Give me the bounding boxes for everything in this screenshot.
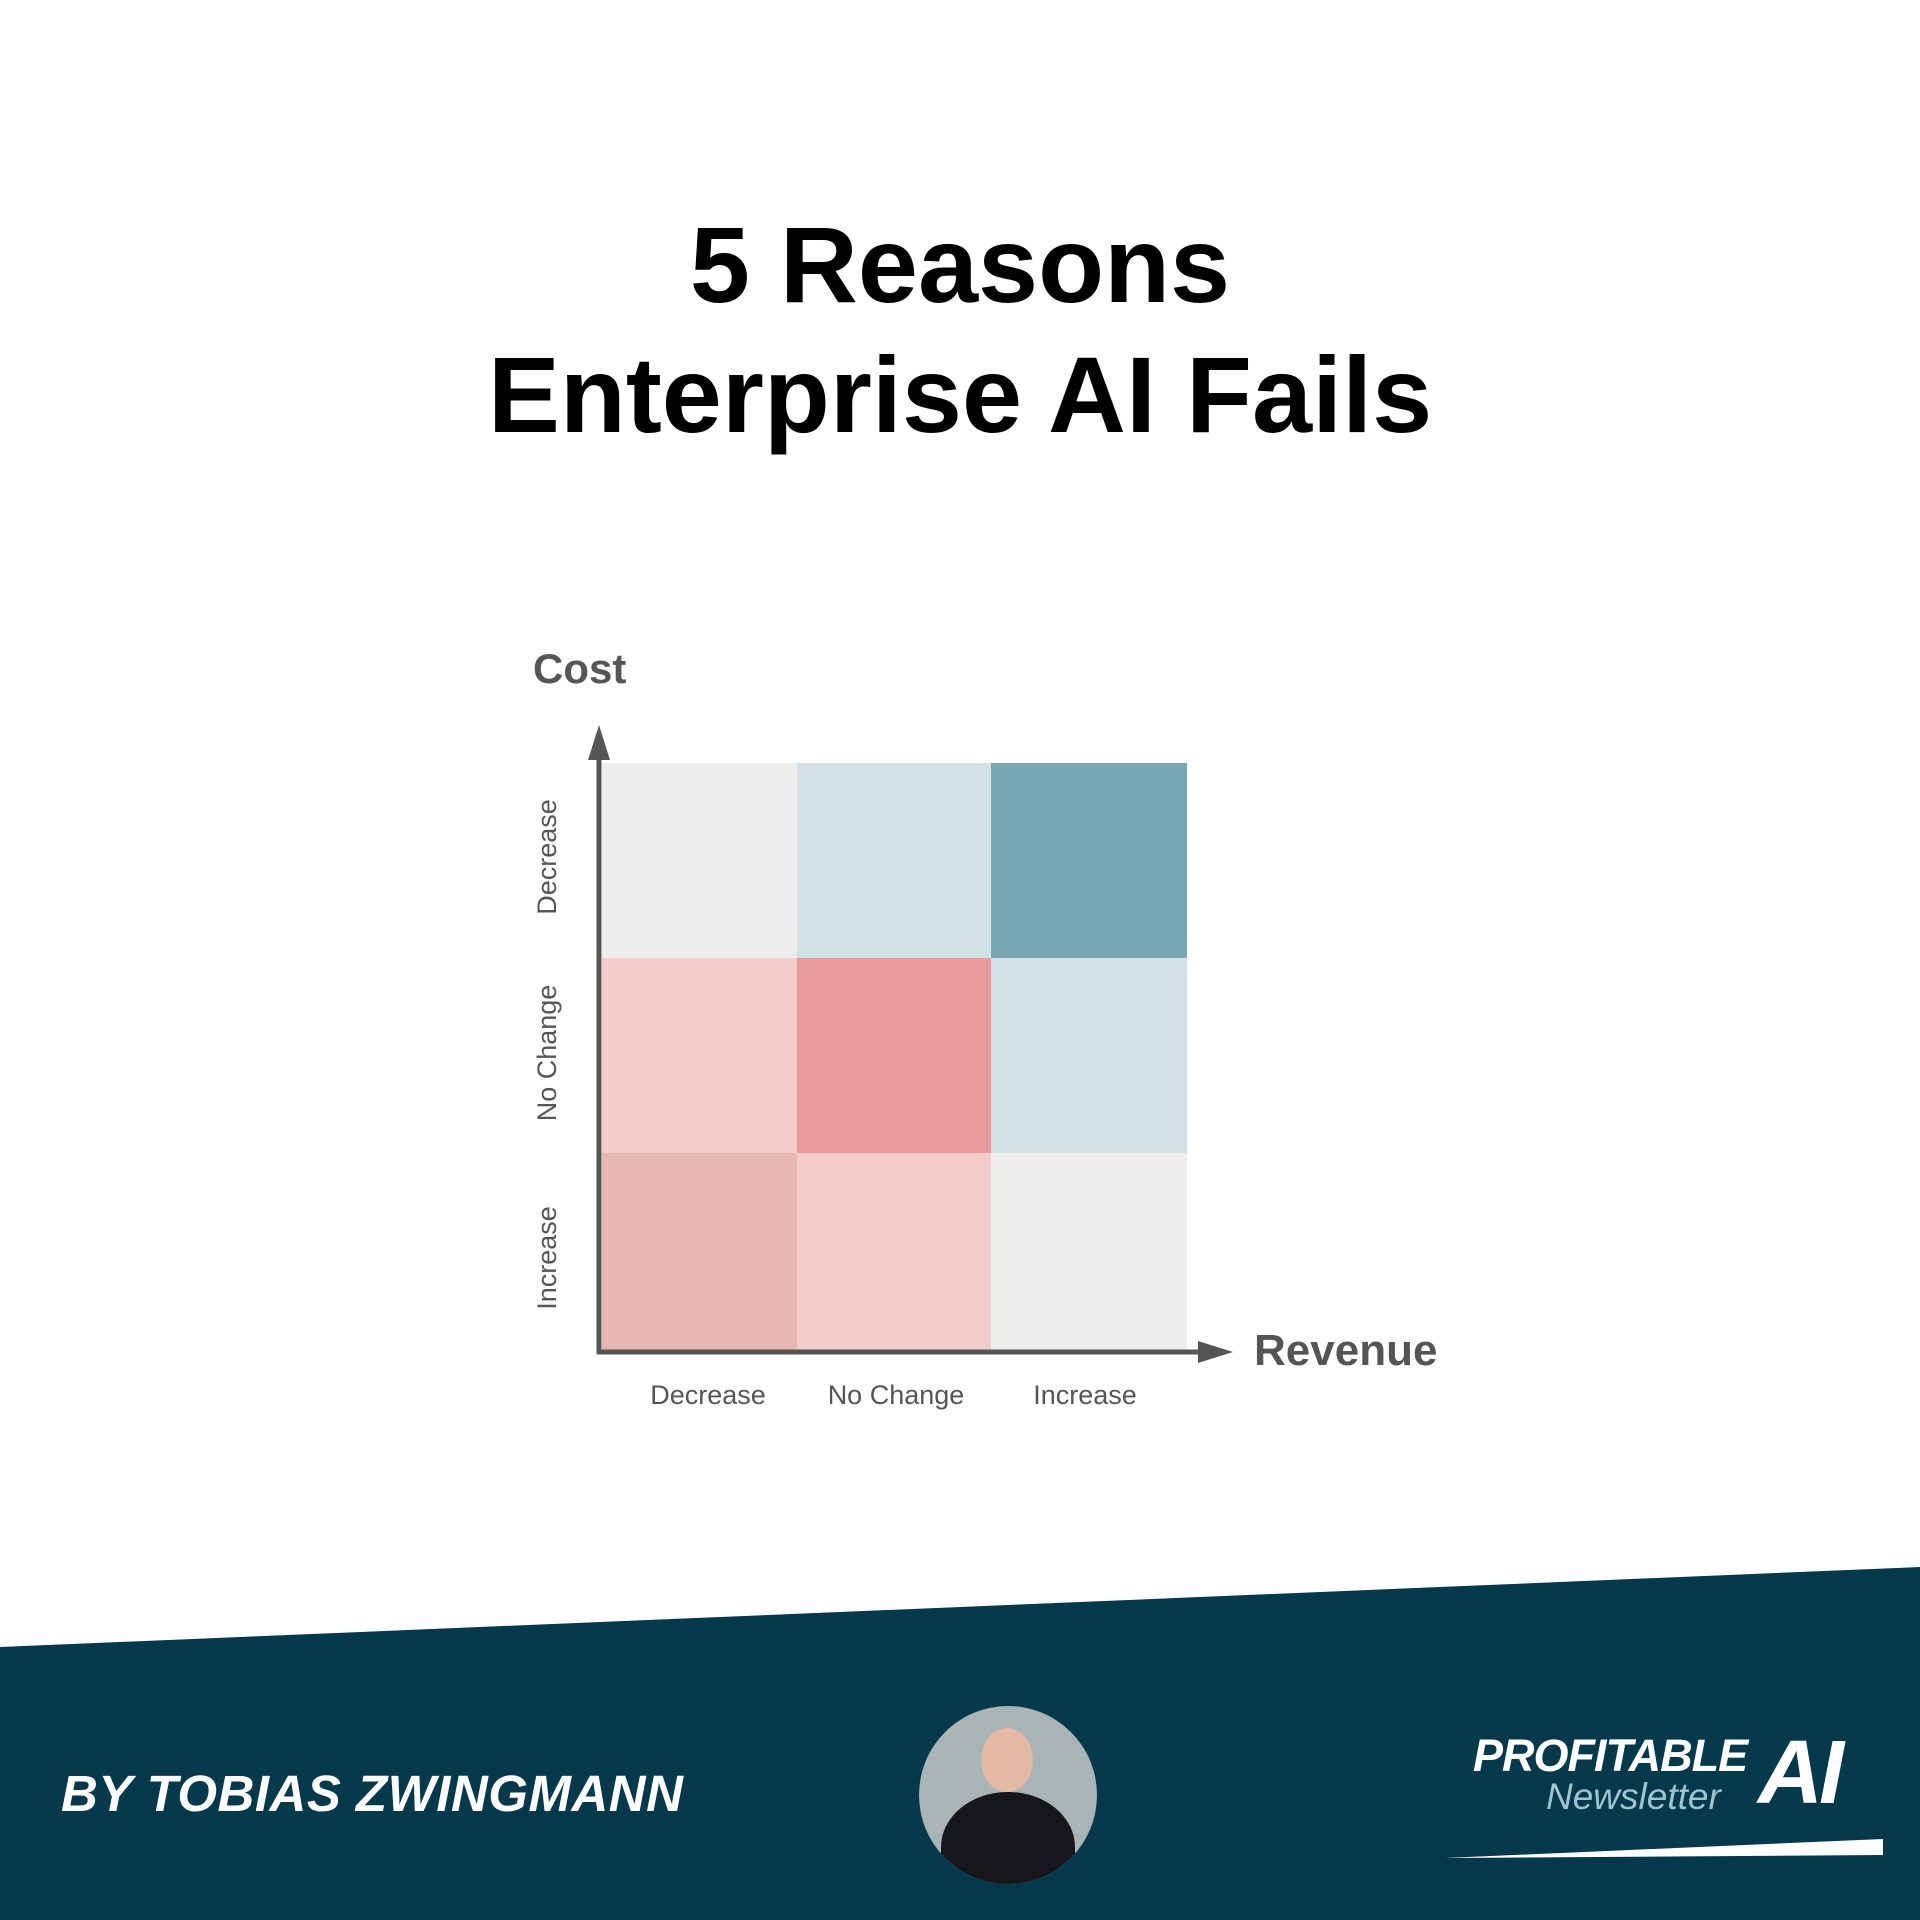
author byline: BY TOBIAS ZWINGMANN <box>61 1765 683 1822</box>
y labels: Increase <box>532 1206 562 1310</box>
heatmap cells <box>602 763 1187 1350</box>
x labels: Decrease <box>650 1380 766 1410</box>
x labels <box>650 1380 1137 1410</box>
logo underline swoosh <box>1445 1839 1883 1858</box>
y labels <box>532 799 562 1310</box>
x labels: No Change <box>828 1380 964 1410</box>
axes arrows <box>588 725 1233 1363</box>
x labels: Increase <box>1033 1380 1137 1410</box>
chart: cost vs revenue matrix <box>532 645 1437 1410</box>
footer band <box>0 1567 1920 1920</box>
logo: Profitable AI Newsletter: AI <box>1758 1723 1840 1823</box>
axis title: Cost: Cost <box>533 645 626 692</box>
title: 5 Reasons <box>690 204 1230 325</box>
y labels: No Change <box>532 985 562 1121</box>
logo: Profitable AI Newsletter: PROFITABLE <box>1473 1730 1747 1781</box>
author photo <box>919 1706 1097 1884</box>
logo: Profitable AI Newsletter: Newsletter <box>1546 1776 1721 1817</box>
title <box>488 204 1432 455</box>
title: Enterprise AI Fails <box>488 334 1432 455</box>
axis title: Revenue: Revenue <box>1254 1326 1437 1375</box>
y labels: Decrease <box>532 799 562 915</box>
logo: Profitable AI Newsletter <box>1473 1723 1846 1823</box>
